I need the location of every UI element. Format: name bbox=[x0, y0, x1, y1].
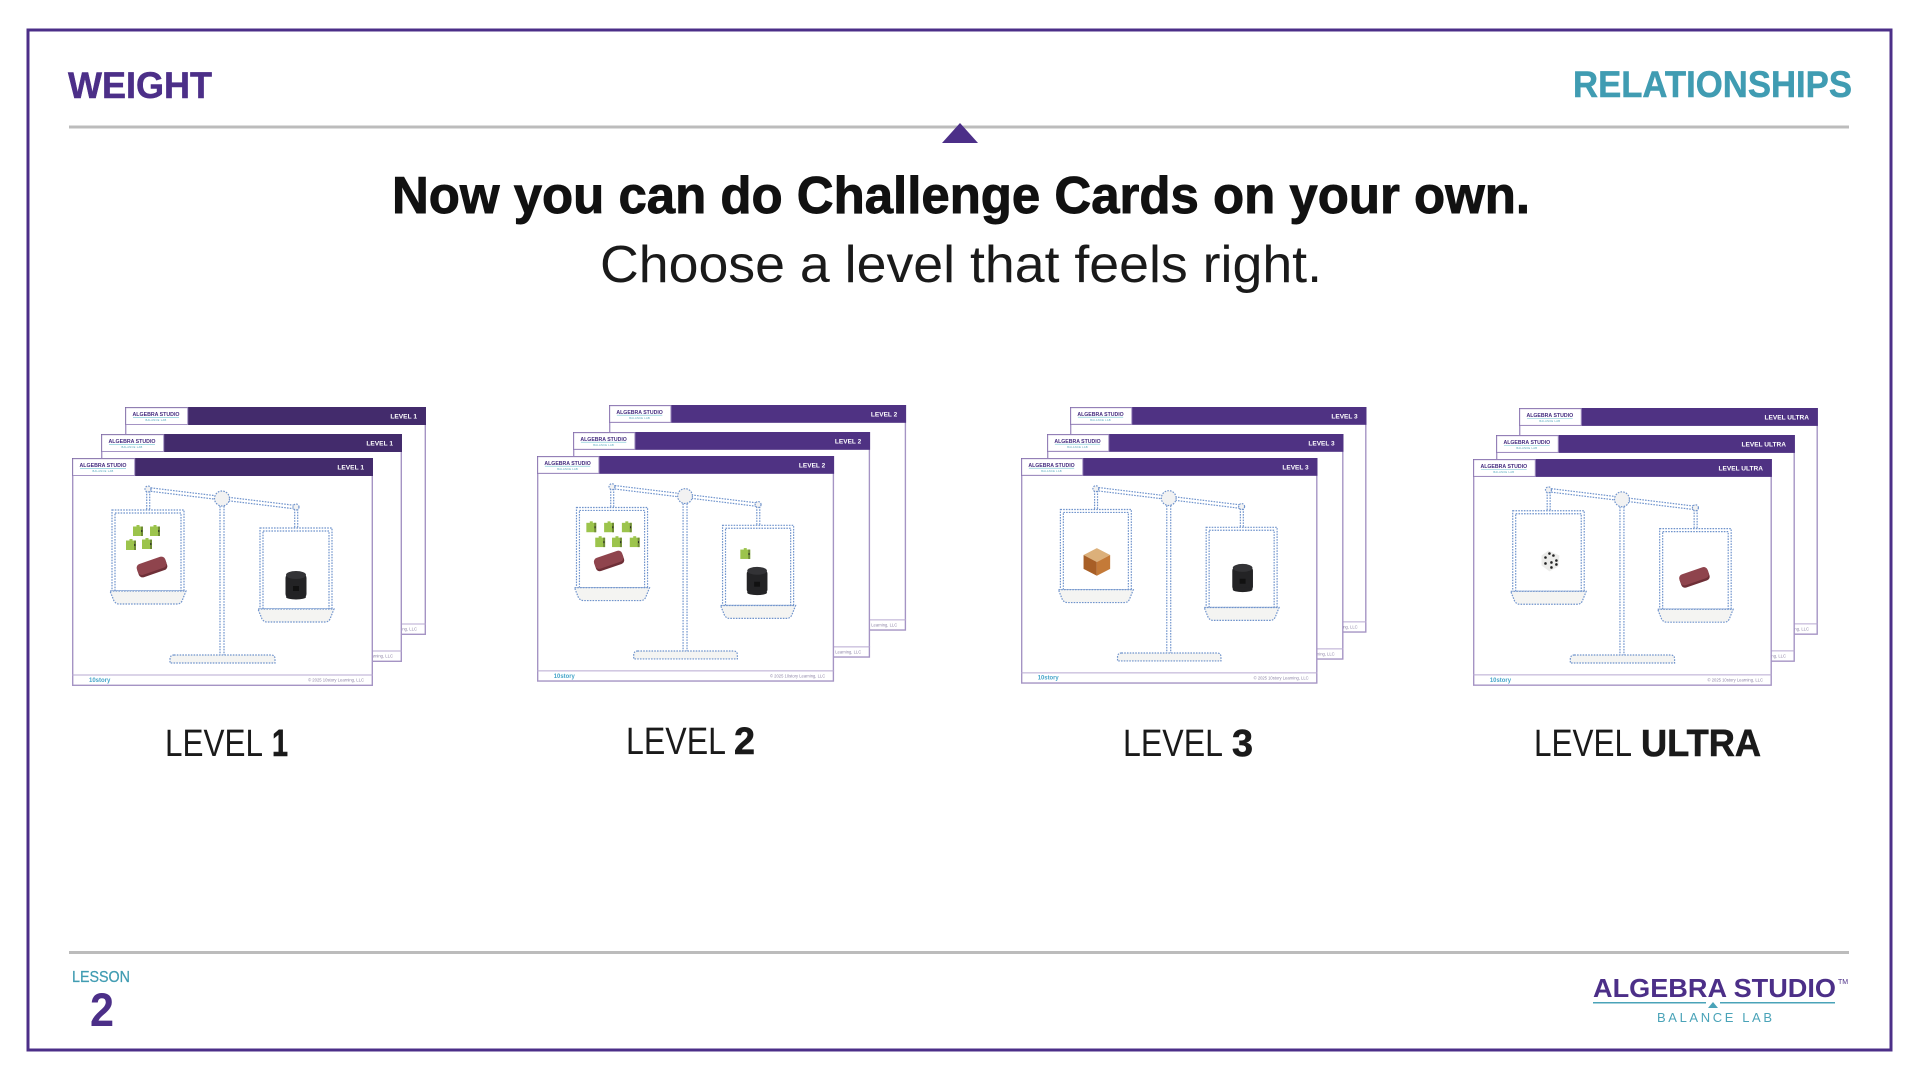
logo: Algebra Studio Balance Lab: BALANCE LAB bbox=[1657, 1010, 1772, 1025]
title: Now you can do Challenge Cards on your own. bbox=[392, 167, 1530, 225]
level 2 front card: 10story bbox=[554, 674, 576, 680]
level 2 back card bbox=[609, 405, 906, 630]
level ultra label: ULTRA bbox=[1641, 723, 1761, 765]
heading: strand RELATIONSHIPS: RELATIONSHIPS bbox=[1573, 64, 1852, 105]
level 2 front card: BALANCE LAB bbox=[557, 467, 578, 471]
level 3 middle card: © 2025 10story Learning, LLC bbox=[1280, 651, 1335, 656]
level 1 front card: LEVEL 1 bbox=[337, 464, 364, 472]
level ultra back card: ALGEBRA STUDIO bbox=[1526, 413, 1574, 419]
subtitle: Choose a level that feels right. bbox=[600, 236, 1322, 294]
level ultra back card: © 2025 10story Learning, LLC bbox=[1753, 626, 1809, 631]
level 3 card stack bbox=[1021, 407, 1366, 683]
lesson number: 2 bbox=[90, 983, 114, 1036]
level 1 middle card: BALANCE LAB bbox=[121, 445, 143, 449]
level 1 middle card bbox=[101, 434, 402, 661]
level 2 middle card: © 2025 10story Learning, LLC bbox=[806, 649, 861, 654]
logo: Algebra Studio Balance Lab: TM bbox=[1838, 979, 1848, 986]
level 2 front card: ALGEBRA STUDIO bbox=[544, 461, 591, 467]
level ultra front card: BALANCE LAB bbox=[1493, 470, 1514, 474]
level 1 middle card: ALGEBRA STUDIO bbox=[108, 439, 156, 445]
level 1 front card: © 2025 10story Learning, LLC bbox=[308, 678, 364, 682]
header rule with triangle marker bbox=[69, 123, 1849, 146]
level 1 balance scale bbox=[110, 486, 334, 663]
level ultra middle card: LEVEL ULTRA bbox=[1742, 441, 1786, 448]
level ultra front card: © 2025 10story Learning, LLC bbox=[1707, 677, 1763, 682]
level ultra middle card: ALGEBRA STUDIO bbox=[1503, 440, 1551, 446]
level 1 middle card: LEVEL 1 bbox=[366, 440, 393, 448]
level 2 back card: LEVEL 2 bbox=[871, 411, 898, 418]
level ultra back card: LEVEL ULTRA bbox=[1765, 414, 1809, 421]
level 3 balance scale bbox=[1058, 486, 1279, 661]
footer rule bbox=[69, 951, 1849, 954]
level ultra back card bbox=[1519, 408, 1818, 634]
level 1 middle card: © 2025 10story Learning, LLC bbox=[337, 654, 393, 658]
level ultra middle card: BALANCE LAB bbox=[1516, 446, 1537, 450]
level 3 back card bbox=[1070, 407, 1366, 632]
level 2 back card: BALANCE LAB bbox=[629, 416, 650, 420]
level 1 back card: BALANCE LAB bbox=[145, 418, 167, 422]
level 1 back card: LEVEL 1 bbox=[390, 414, 417, 420]
level 2 middle card bbox=[573, 432, 870, 657]
lesson label: LESSON bbox=[72, 969, 130, 986]
level ultra back card: BALANCE LAB bbox=[1539, 419, 1560, 423]
level ultra front card bbox=[1473, 459, 1772, 685]
level 3 label: 3 bbox=[1232, 723, 1253, 765]
level 1 front card: BALANCE LAB bbox=[92, 469, 114, 473]
level 2 card stack bbox=[537, 405, 906, 681]
level 3 front card: BALANCE LAB bbox=[1041, 469, 1062, 473]
level 3 back card: LEVEL 3 bbox=[1331, 413, 1358, 420]
logo: Algebra Studio Balance Lab bbox=[1593, 973, 1848, 1025]
level 3 front card: © 2025 10story Learning, LLC bbox=[1254, 675, 1309, 680]
white die bbox=[1542, 551, 1559, 571]
level 1 back card: ALGEBRA STUDIO bbox=[132, 412, 180, 418]
level 2 middle card: LEVEL 2 bbox=[835, 438, 862, 445]
level 3 label: LEVEL bbox=[1123, 723, 1223, 765]
level 1 front card: ALGEBRA STUDIO bbox=[80, 463, 127, 469]
level 2 front card: LEVEL 2 bbox=[799, 462, 826, 469]
level ultra front card: ALGEBRA STUDIO bbox=[1480, 464, 1528, 470]
level 1 label: 1 bbox=[272, 723, 288, 765]
level 2 front card: © 2025 10story Learning, LLC bbox=[770, 673, 825, 678]
level 3 back card: BALANCE LAB bbox=[1090, 418, 1111, 422]
level 1 front card: 10story bbox=[89, 678, 111, 684]
level 1 label: LEVEL bbox=[165, 723, 263, 765]
level 2 back card: © 2025 10story Learning, LLC bbox=[842, 622, 897, 627]
level 2 middle card: BALANCE LAB bbox=[593, 443, 614, 447]
level 3 back card: © 2025 10story Learning, LLC bbox=[1303, 624, 1358, 629]
level ultra middle card bbox=[1496, 435, 1795, 661]
logo: Algebra Studio Balance Lab: ALGEBRA STUDIO bbox=[1593, 973, 1836, 1003]
level 3 middle card: ALGEBRA STUDIO bbox=[1054, 439, 1101, 445]
level ultra card stack bbox=[1473, 408, 1818, 685]
level 3 middle card: BALANCE LAB bbox=[1067, 445, 1088, 449]
level ultra front card: 10story bbox=[1490, 678, 1512, 684]
level ultra balance scale bbox=[1511, 487, 1733, 663]
level ultra label: LEVEL bbox=[1534, 723, 1632, 765]
level 3 front card: LEVEL 3 bbox=[1282, 464, 1309, 471]
level 3 front card: ALGEBRA STUDIO bbox=[1028, 463, 1075, 469]
level ultra middle card: © 2025 10story Learning, LLC bbox=[1730, 653, 1786, 658]
level 3 front card bbox=[1021, 458, 1317, 683]
level 3 back card: ALGEBRA STUDIO bbox=[1077, 412, 1124, 418]
level 3 middle card bbox=[1047, 434, 1343, 659]
heading: unit WEIGHT: WEIGHT bbox=[68, 65, 212, 106]
wood cube bbox=[1084, 548, 1110, 576]
level 2 label: 2 bbox=[734, 721, 755, 763]
level 3 front card: 10story bbox=[1038, 676, 1059, 682]
level 1 back card: © 2025 10story Learning, LLC bbox=[361, 626, 417, 632]
level ultra front card: LEVEL ULTRA bbox=[1719, 465, 1763, 472]
level 1 front card bbox=[72, 458, 373, 685]
level 2 front card bbox=[537, 456, 834, 681]
level ultra label bbox=[1534, 723, 1761, 765]
level 2 back card: ALGEBRA STUDIO bbox=[616, 410, 663, 416]
level 2 middle card: ALGEBRA STUDIO bbox=[580, 437, 627, 443]
level 3 middle card: LEVEL 3 bbox=[1308, 440, 1335, 447]
level 1 card stack bbox=[72, 407, 426, 685]
level 2 label: LEVEL bbox=[626, 721, 726, 763]
level 1 back card bbox=[125, 407, 426, 634]
level 2 balance scale bbox=[575, 484, 796, 659]
